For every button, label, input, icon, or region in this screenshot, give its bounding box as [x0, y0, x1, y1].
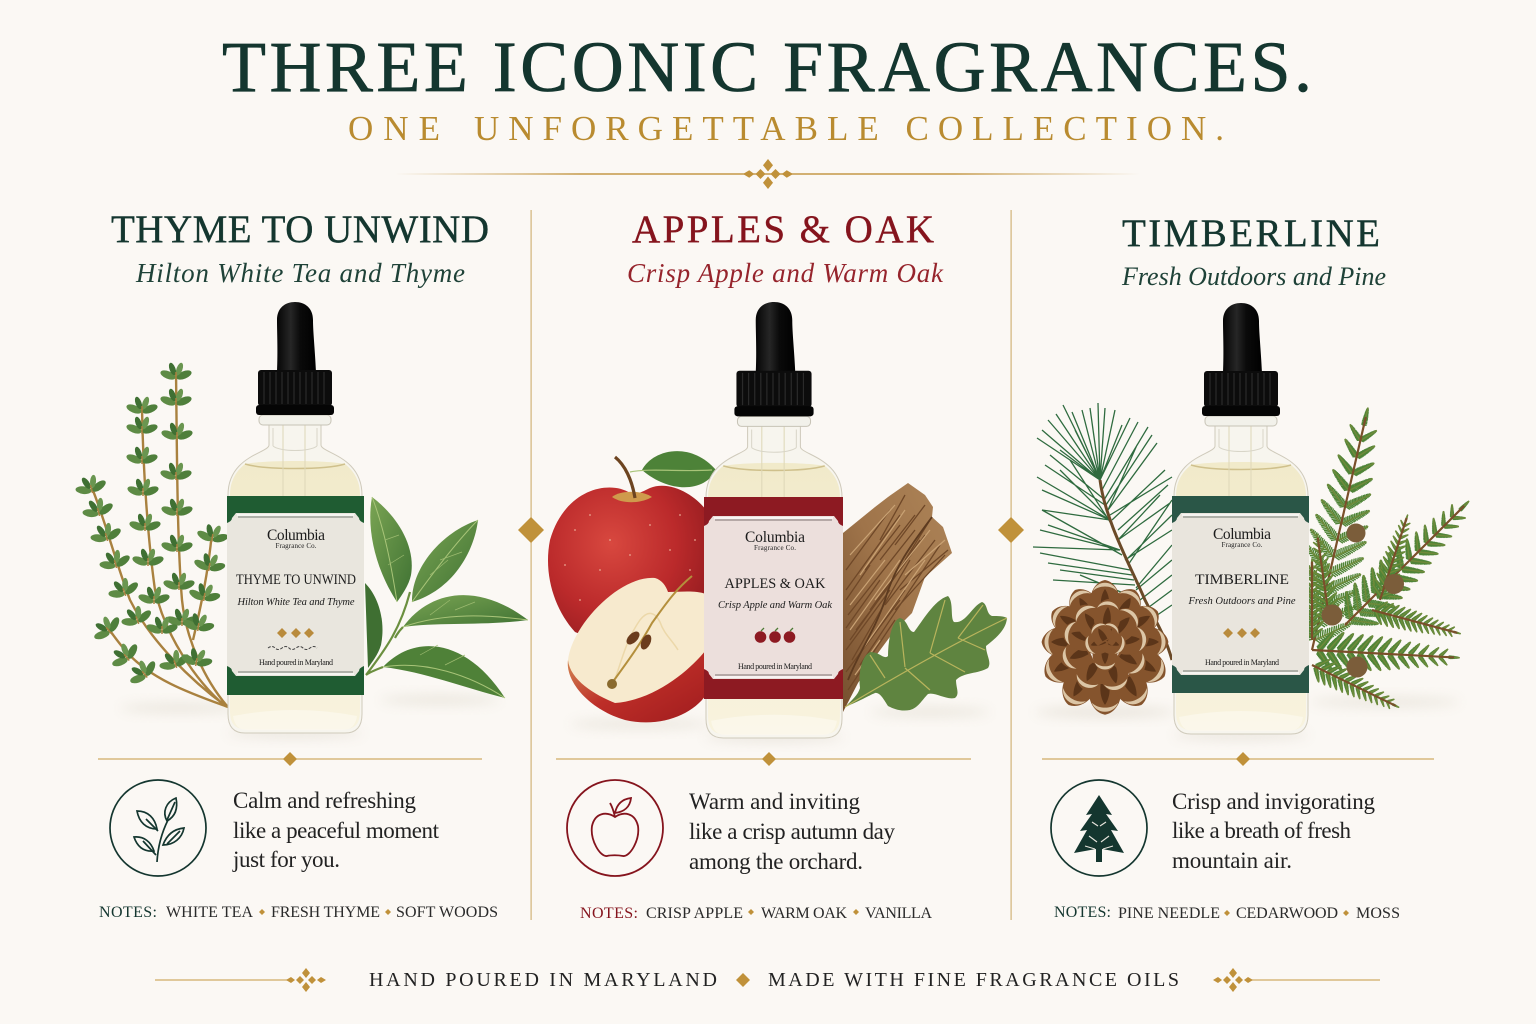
label text: Fragrance Co.: [1222, 541, 1263, 549]
subheading: Crisp Apple and Warm Oak: Crisp Apple and Warm Oak: [627, 258, 944, 288]
label text: Fragrance Co.: [754, 544, 796, 552]
illustration: whole apple: [548, 451, 716, 650]
description: like a breath of fresh: [1172, 818, 1352, 843]
label text: TIMBERLINE: [1195, 572, 1289, 588]
notes: SOFT WOODS: [396, 904, 498, 921]
panel: Apples & Oak: [548, 208, 1007, 922]
description: [1172, 789, 1376, 873]
label text: Hand poured in Maryland: [738, 662, 812, 671]
illustration: thyme sprigs: [72, 362, 240, 713]
description: Calm and refreshing: [233, 788, 416, 813]
bottle: Apples & Oak: [704, 302, 844, 742]
bottle: Timberline: [1172, 303, 1309, 740]
notes: MOSS: [1356, 905, 1400, 922]
column divider right: [998, 210, 1024, 920]
label text: Columbia: [267, 527, 325, 544]
label text: Hand poured in Maryland: [259, 658, 333, 667]
label text: APPLES & OAK: [724, 576, 826, 592]
notes: FRESH THYME: [271, 904, 380, 921]
subtitle: ONE: [348, 109, 440, 148]
footer diamond: [736, 973, 750, 987]
bottle: Thyme to Unwind: [227, 302, 364, 738]
illustration: oak bark: [843, 483, 952, 712]
subheading: Hilton White Tea and Thyme: Hilton White Tea and Thyme: [135, 258, 465, 288]
label diamonds: [1223, 628, 1260, 638]
label band: [227, 496, 364, 695]
section divider: [98, 752, 482, 766]
description: Warm and inviting: [689, 789, 860, 814]
label text: Columbia: [1213, 526, 1271, 543]
subheading: Fresh Outdoors and Pine: Fresh Outdoors and Pine: [1121, 262, 1386, 291]
description: [689, 789, 896, 874]
notes: [580, 905, 932, 922]
description: mountain air.: [1172, 848, 1292, 873]
label text: [718, 529, 832, 671]
illustration: tea leaves: [365, 497, 528, 705]
column divider left: [518, 210, 544, 920]
notes: CEDARWOOD: [1236, 905, 1338, 922]
label text: [236, 527, 356, 667]
subtitle: UNFORGETTABLE COLLECTION.: [474, 109, 1224, 148]
label text: Fresh Outdoors and Pine: [1188, 596, 1296, 607]
section divider: [1042, 752, 1434, 766]
footer text right: MADE WITH FINE FRAGRANCE OILS: [768, 969, 1179, 991]
panel: Timberline: [1033, 212, 1487, 922]
description: just for you.: [232, 847, 340, 872]
notes: VANILLA: [865, 905, 932, 922]
illustration: apple half: [568, 576, 710, 729]
icon: leaf sprig: [110, 780, 206, 876]
label text: Hilton White Tea and Thyme: [236, 597, 355, 608]
description: like a crisp autumn day: [689, 819, 896, 844]
notes: PINE NEEDLE: [1118, 905, 1220, 922]
label text: Hand poured in Maryland: [1205, 658, 1279, 667]
notes: NOTES:: [580, 905, 638, 922]
label panel: [704, 516, 843, 679]
label apples: [755, 628, 795, 643]
label text: Fragrance Co.: [276, 542, 317, 550]
panel: Thyme to Unwind: [72, 208, 528, 921]
notes: [1054, 904, 1400, 922]
description: among the orchard.: [689, 849, 863, 874]
heading: Apples & Oak: APPLES & OAK: [632, 208, 934, 251]
label text: [1188, 526, 1296, 667]
label text: THYME TO UNWIND: [236, 572, 356, 588]
label text: Columbia: [745, 529, 805, 546]
footer: [155, 968, 1380, 992]
footer ornament right: [1213, 968, 1380, 992]
notes: [99, 904, 498, 921]
illustration: pine branch: [1033, 403, 1172, 660]
notes: NOTES:: [1054, 904, 1111, 921]
description: Crisp and invigorating: [1172, 789, 1376, 814]
label diamonds: [277, 628, 314, 638]
illustration: spruce branch: [1277, 399, 1487, 720]
label panel: [227, 513, 364, 676]
description: like a peaceful moment: [233, 818, 440, 843]
heading: Thyme to Unwind: THYME TO UNWIND: [111, 208, 489, 251]
title: THREE ICONIC FRAGRANCES.: [222, 27, 1312, 107]
notes: NOTES:: [99, 904, 157, 921]
icon: pine tree: [1051, 780, 1147, 876]
label text: Crisp Apple and Warm Oak: [718, 600, 832, 611]
icon: apple: [567, 780, 663, 876]
notes: WHITE TEA: [166, 904, 253, 921]
label band: [704, 497, 843, 699]
notes: WARM OAK: [761, 905, 847, 922]
illustration: oak leaf: [845, 596, 1007, 717]
illustration: pine cone: [1035, 580, 1175, 717]
label panel: [1172, 513, 1309, 675]
section divider: [556, 752, 971, 766]
notes: CRISP APPLE: [646, 905, 743, 922]
footer ornament left: [155, 968, 326, 992]
description: [232, 788, 440, 872]
label band: [1172, 496, 1309, 693]
heading: Timberline: TIMBERLINE: [1122, 212, 1380, 255]
footer text left: HAND POURED IN MARYLAND: [369, 969, 717, 991]
header divider ornament: [395, 159, 1140, 189]
